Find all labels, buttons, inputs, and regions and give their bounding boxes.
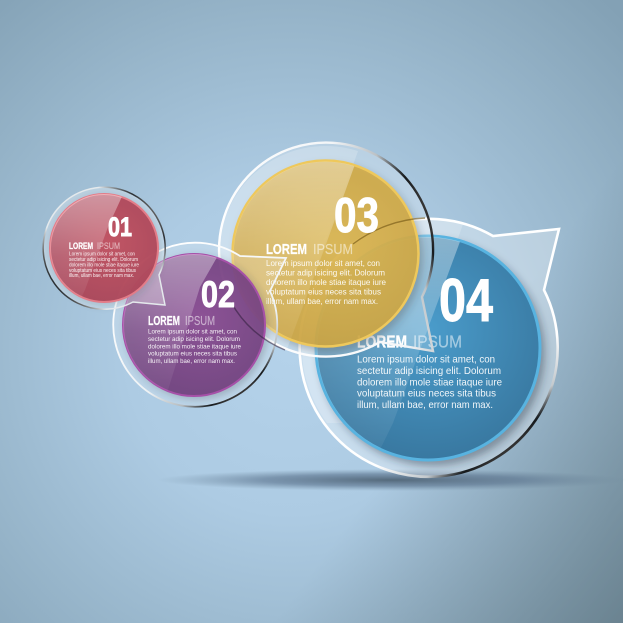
body text 01: voluptatum eius neces sita tibus <box>69 268 136 274</box>
body text 01: dolorem illo mole stiae itaque iure <box>69 262 139 268</box>
heading 01 <box>69 241 120 251</box>
body text 04: sectetur adip isicing elit. Dolorum <box>357 366 501 377</box>
speech bubble outline 04 <box>300 219 559 477</box>
heading 01: LOREM <box>69 241 93 251</box>
heading 01: IPSUM <box>97 241 120 251</box>
body text 03: dolorem illo mole stiae itaque iure <box>266 277 386 287</box>
number 01: 01 <box>108 212 132 242</box>
body text 03: voluptatum eius neces sita tibus <box>266 287 382 297</box>
body text 02: sectetur adip isicing elit. Dolorum <box>148 336 240 343</box>
number 02: 02 <box>201 274 235 315</box>
heading 03: LOREM <box>266 242 307 258</box>
speech bubble outline 03 <box>219 143 433 357</box>
heading 04: IPSUM <box>413 332 462 352</box>
panel: step 03 yellow bubble <box>210 140 433 357</box>
disc 03 <box>232 160 418 346</box>
body text 03: illum, ullam bae, error nam max. <box>266 296 378 306</box>
gloss 04 <box>317 237 460 448</box>
heading 04 <box>357 332 462 352</box>
disc 02 <box>123 254 265 396</box>
body text 03 <box>266 258 386 306</box>
number 04: 04 <box>439 267 494 334</box>
body text 04 <box>357 355 502 411</box>
panel: step 01 red bubble <box>40 187 165 310</box>
disc 01 <box>50 194 158 302</box>
body text 01 <box>69 252 139 279</box>
body text 04: illum, ullam bae, error nam max. <box>357 400 493 411</box>
body text 04: voluptatum eius neces sita tibus <box>357 389 496 400</box>
gloss 03 <box>234 162 354 338</box>
body text 02: voluptatum eius neces sita tibus <box>148 351 238 358</box>
floor shadow <box>157 469 626 491</box>
heading 02: IPSUM <box>185 314 215 328</box>
heading 03 <box>266 242 353 258</box>
heading 02 <box>148 314 215 328</box>
body text 02: illum, ullam bae, error nam max. <box>148 358 235 365</box>
gloss 02 <box>123 254 217 390</box>
heading 03: IPSUM <box>313 242 353 258</box>
body text 04: dolorem illo mole stiae itaque iure <box>357 377 502 388</box>
speech bubble outline 01 <box>43 187 165 309</box>
heading 02: LOREM <box>148 314 180 328</box>
body text 04: Lorem ipsum dolor sit amet, con <box>357 355 495 366</box>
body text 01: illum, ullam bae, error nam max. <box>69 273 134 279</box>
panel: step 04 blue bubble <box>300 210 559 477</box>
body text 03: Lorem ipsum dolor sit amet, con <box>266 258 380 268</box>
number 03: 03 <box>334 189 379 243</box>
speech bubble outline 02 <box>113 243 286 407</box>
body text 02: Lorem ipsum dolor sit amet, con <box>148 329 237 336</box>
gloss 01 <box>50 194 122 296</box>
heading 04: LOREM <box>357 332 407 352</box>
body text 01: Lorem ipsum dolor sit amet, con <box>69 252 135 258</box>
body text 02 <box>148 329 241 365</box>
disc 04 <box>316 236 540 460</box>
body text 03: sectetur adip isicing elit. Dolorum <box>266 268 385 278</box>
panel: step 02 purple bubble <box>110 243 286 407</box>
body text 01: sectetur adip isicing elit. Dolorum <box>69 257 138 263</box>
body text 02: dolorem illo mole stiae itaque iure <box>148 343 241 350</box>
